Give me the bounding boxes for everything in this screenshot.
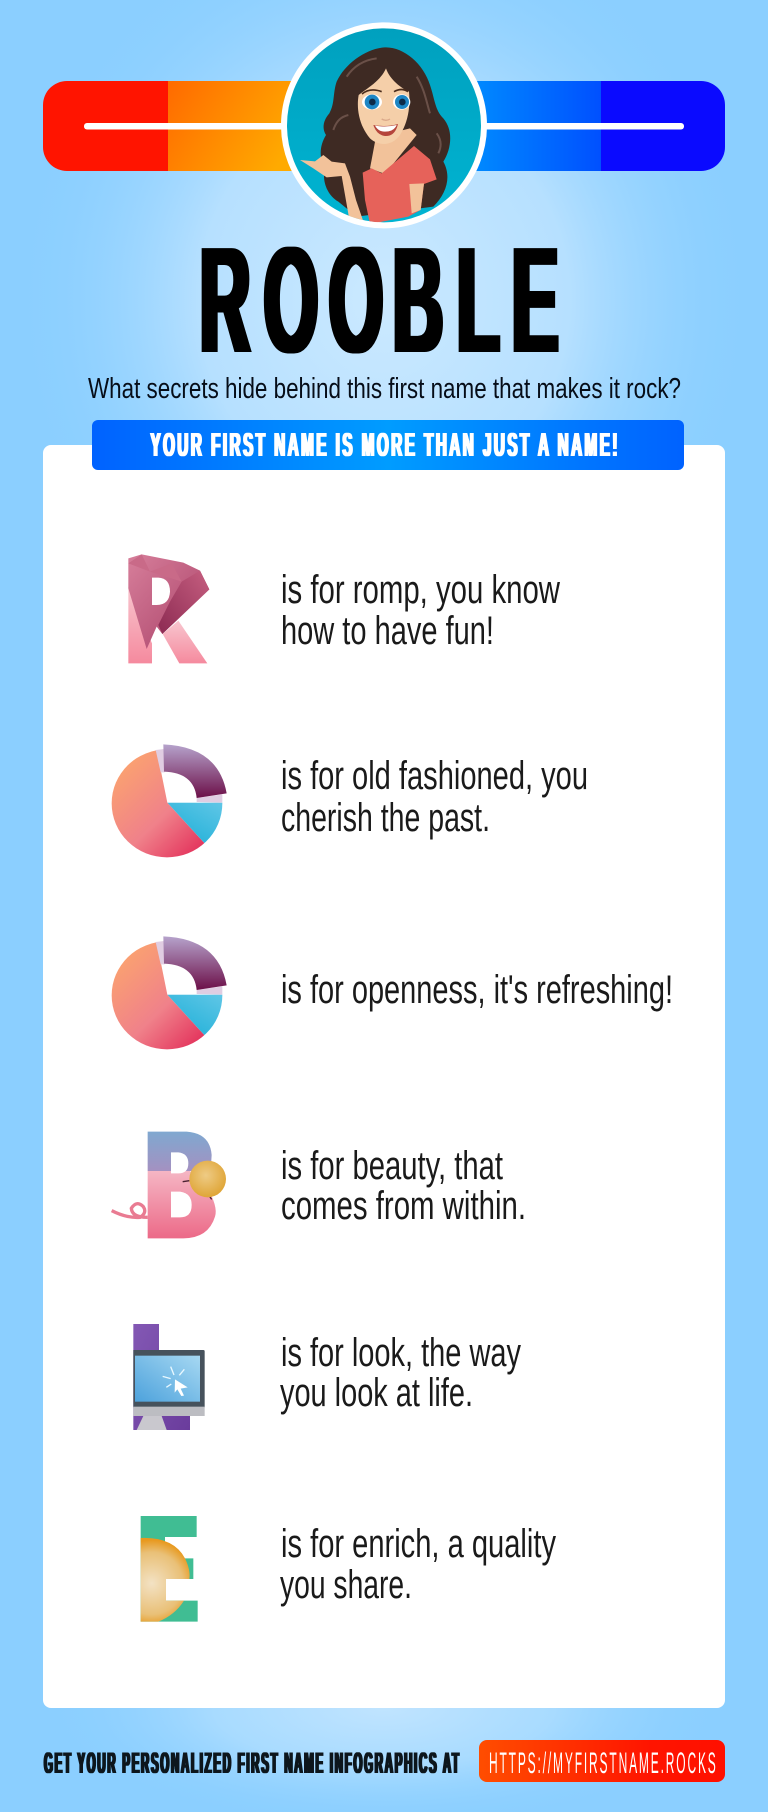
text: enrich: you share. (280, 1563, 412, 1607)
white content panel (43, 445, 725, 1708)
text: look: you look at life. (280, 1371, 473, 1415)
text: beauty (281, 1144, 526, 1228)
text: look (280, 1331, 521, 1415)
icon: L with monitor (133, 1324, 205, 1430)
text: enrich (280, 1522, 556, 1607)
row O second (112, 936, 673, 1049)
text: old fashioned: is for old fashioned, you (281, 754, 588, 798)
text: look: is for look, the way (281, 1331, 521, 1375)
icon: O pie chart second (112, 936, 227, 1049)
avatar portrait (284, 25, 484, 225)
icon: O pie chart (112, 744, 227, 857)
name title: ROOBLE (200, 216, 558, 384)
text: beauty: comes from within. (281, 1184, 526, 1228)
white line across bar (84, 123, 684, 130)
text: romp (281, 568, 560, 653)
shirt (363, 146, 437, 224)
neck (370, 128, 417, 174)
text: enrich: is for enrich, a quality (281, 1522, 556, 1566)
row R (128, 554, 560, 663)
hair (321, 47, 450, 217)
text: romp: is for romp, you know (281, 568, 560, 612)
mouth (373, 124, 398, 136)
row B (112, 1132, 526, 1238)
text: romp: how to have fun! (281, 609, 494, 653)
row L (133, 1324, 521, 1430)
hair highlights (333, 58, 441, 153)
text: old fashioned (281, 754, 588, 840)
arms (300, 155, 424, 223)
eyes (362, 89, 410, 110)
banner: YOUR FIRST NAME IS MORE THAN JUST A NAME! (150, 428, 617, 464)
row O (112, 744, 588, 857)
footer URL button: HTTPS://MYFIRSTNAME.ROCKS (489, 1745, 716, 1780)
icon: R with gem (128, 554, 209, 663)
icon: E with gold coin (141, 1516, 198, 1622)
icon: B piggy bank (112, 1132, 226, 1238)
text: beauty: is for beauty, that (281, 1144, 503, 1188)
text: old fashioned: cherish the past. (281, 796, 490, 840)
row E (141, 1516, 556, 1622)
face (358, 68, 409, 144)
footer call to action: GET YOUR PERSONALIZED FIRST NAME INFOGRAPHICS AT (44, 1745, 459, 1780)
banner (92, 420, 684, 470)
header colour bar (43, 81, 725, 171)
